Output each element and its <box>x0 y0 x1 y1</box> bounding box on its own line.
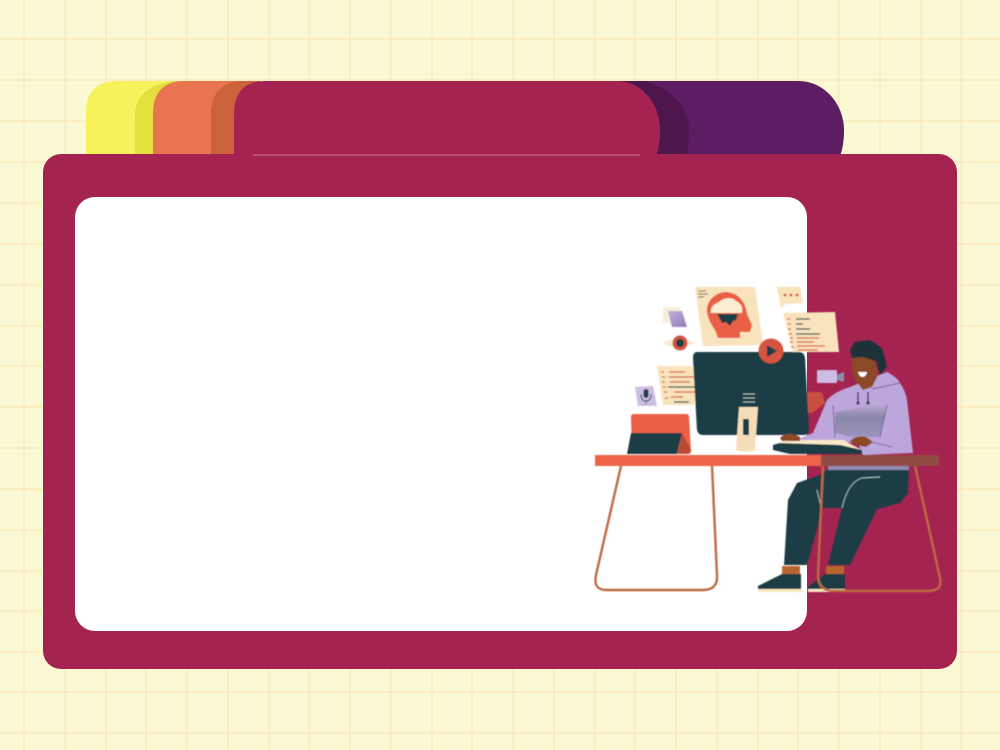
floating card: code right <box>783 312 839 352</box>
head <box>850 340 887 390</box>
floating card: brain head <box>695 287 763 346</box>
folder tab: purple <box>600 81 844 156</box>
coral box behind monitor <box>806 392 825 413</box>
hoodie <box>800 372 913 470</box>
white content panel <box>75 197 807 631</box>
floating card: code left <box>657 366 700 405</box>
icon: purple square <box>663 307 687 327</box>
feet <box>758 566 845 592</box>
folder body <box>43 154 957 669</box>
icon: microphone <box>635 386 657 406</box>
folder tab: yellow <box>86 81 190 156</box>
trousers <box>784 469 909 565</box>
folder tab: magenta front <box>234 81 660 156</box>
icon: eye <box>663 336 695 350</box>
desk top <box>595 455 939 466</box>
keyboard and hands <box>773 434 873 454</box>
folder tab: orange <box>153 81 260 156</box>
illustration: person working at desk <box>595 287 940 592</box>
icon: video camera <box>817 370 844 383</box>
tablet <box>627 414 691 454</box>
desk legs <box>595 466 940 591</box>
icon: play button <box>758 338 784 364</box>
monitor <box>693 352 809 452</box>
floating card: chat bubble <box>777 287 803 309</box>
